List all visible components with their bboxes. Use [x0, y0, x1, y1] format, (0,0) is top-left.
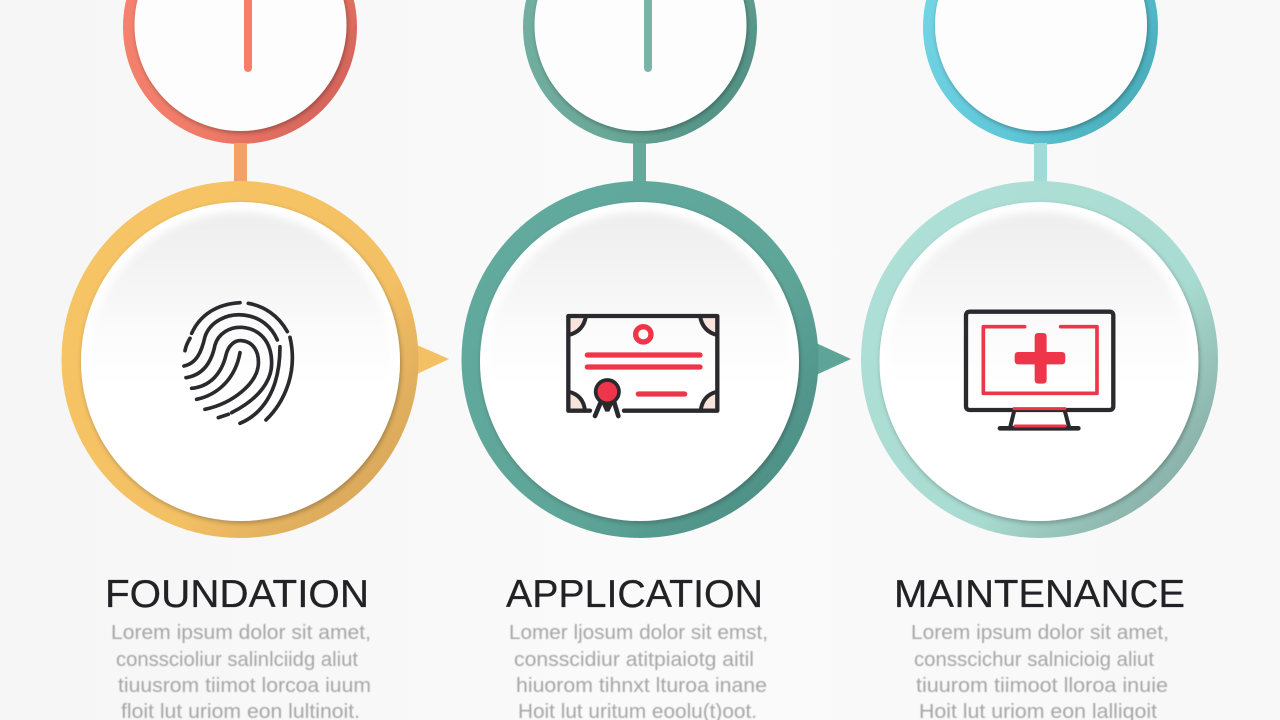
- text block: application: Lomer ljosum dolor sit emst,: [509, 621, 768, 644]
- connector: maintenance: [1034, 143, 1047, 183]
- heading: foundation: FOUNDATION: [105, 573, 369, 616]
- text block: foundation: Lorem ipsum dolor sit amet,: [111, 621, 371, 644]
- panel: maintenance: [861, 0, 1218, 720]
- top ring: green: [523, 0, 757, 144]
- top ring: cyan: [923, 0, 1158, 144]
- icon: certificate: [568, 316, 717, 416]
- icon: fingerprint: [184, 303, 292, 423]
- panel: foundation: [62, 0, 449, 720]
- panel: application: [462, 0, 851, 720]
- connector: foundation: [234, 143, 247, 183]
- main ring: mint: [861, 181, 1218, 538]
- text block: maintenance: consscichur salnicioig aliut: [914, 648, 1154, 671]
- heading: maintenance: MAINTENANCE: [894, 573, 1185, 616]
- text block: application: consscidiur atitpiaiotg aitil: [514, 648, 754, 671]
- main ring: teal: [462, 181, 818, 538]
- text block: foundation: tiuusrom tiimot lorcoa iuum: [118, 674, 371, 697]
- arrow: application: [816, 343, 851, 375]
- text block: foundation: consscioliur salinlciidg aliut: [116, 648, 358, 671]
- text block: application: hiuorom tihnxt lturoa inane: [516, 674, 767, 697]
- text block: maintenance: tiuurom tiimoot lloroa inuie: [916, 674, 1168, 697]
- main ring: yellow: [62, 181, 418, 538]
- heading: application: APPLICATION: [506, 573, 763, 616]
- connector: application: [633, 143, 646, 183]
- text block: maintenance: Lorem ipsum dolor sit amet,: [911, 621, 1169, 644]
- icon: medical monitor: [966, 312, 1113, 428]
- text block: foundation: [111, 621, 371, 720]
- text block: application: [509, 621, 768, 720]
- top ring: coral: [123, 0, 357, 144]
- text block: maintenance: [911, 621, 1169, 720]
- arrow: foundation: [417, 345, 449, 374]
